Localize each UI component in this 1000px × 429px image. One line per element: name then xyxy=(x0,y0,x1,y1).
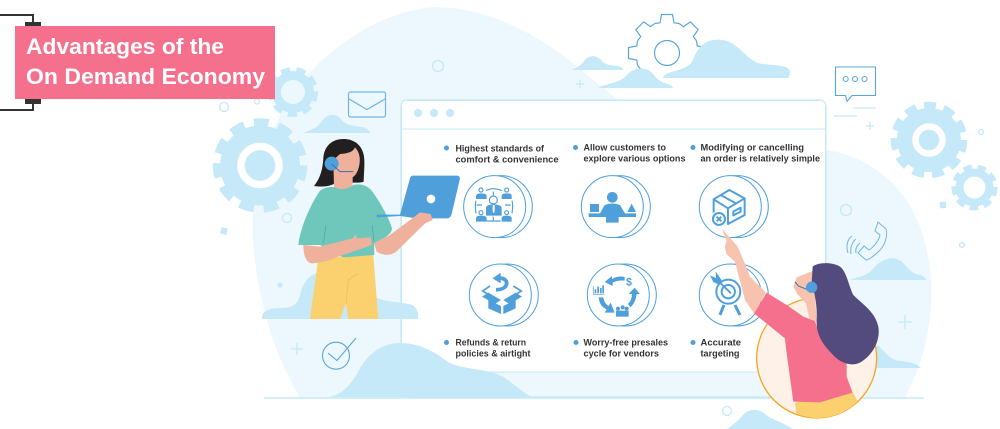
feature: modifying an order: an order is relatively simple xyxy=(700,154,820,165)
headset xyxy=(795,282,817,293)
feature: accurate targeting xyxy=(690,337,741,359)
title banner: On Demand Economy xyxy=(26,64,265,89)
shirt xyxy=(298,184,392,257)
feature: modifying an order: Modifying or cancelling xyxy=(700,143,804,154)
background blob right xyxy=(826,150,931,398)
gear: small right xyxy=(954,167,995,208)
feature: refunds: Refunds & return xyxy=(456,337,526,348)
chat bubble icon xyxy=(836,67,876,102)
icon: returned open box xyxy=(469,264,538,326)
icon: person weighing options xyxy=(581,176,650,238)
cloud: lower right xyxy=(860,345,921,368)
feature: worry-free presales xyxy=(574,337,668,359)
feature: refunds xyxy=(444,337,531,359)
ground line xyxy=(264,397,924,399)
illustration: woman with laptop xyxy=(298,139,460,319)
phone icon xyxy=(847,222,887,260)
title banner: Advantages of the xyxy=(26,34,224,59)
hair xyxy=(314,139,364,187)
decorative marks xyxy=(220,60,984,416)
window frame xyxy=(401,100,826,397)
clouds: top group xyxy=(572,40,790,88)
icon: presales cycle: $ xyxy=(626,276,632,288)
check circle icon xyxy=(322,338,356,369)
envelope icon xyxy=(348,92,386,117)
face xyxy=(793,271,817,322)
illustration: woman pointing xyxy=(722,229,879,418)
cloud: window bottom xyxy=(330,343,532,397)
pants xyxy=(795,393,857,418)
feature: highest standards: Highest standards of xyxy=(456,144,545,155)
icon: people network xyxy=(464,176,532,238)
feature: worry-free presales: cycle for vendors xyxy=(584,348,659,359)
gear: small top left xyxy=(270,70,316,114)
icon: presales cycle xyxy=(587,264,656,326)
feature: refunds: policies & airtight xyxy=(456,348,531,359)
feature: modifying an order xyxy=(690,143,820,165)
arm across body xyxy=(303,234,372,263)
pants xyxy=(310,255,378,319)
feature: highest standards: comfort & convenience xyxy=(456,155,558,166)
feature: accurate targeting: targeting xyxy=(700,348,740,359)
gear: large left xyxy=(217,122,303,208)
pointing arm xyxy=(722,229,766,313)
gear: outline top xyxy=(628,14,706,89)
cloud: under small gear xyxy=(303,115,370,133)
feature: worry-free presales: Worry-free presales xyxy=(584,337,668,348)
window dots xyxy=(414,109,454,117)
icon: cancelled box xyxy=(699,176,768,238)
cloud: bottom center xyxy=(727,410,793,429)
orange circle xyxy=(757,298,877,418)
cloud: behind first woman xyxy=(262,273,418,319)
cloud: beside phone xyxy=(850,258,926,280)
feature: accurate targeting: Accurate xyxy=(700,337,741,348)
feature: highest standards xyxy=(444,144,558,166)
feature: allow customers: Allow customers to xyxy=(584,143,666,154)
background blob left xyxy=(253,7,640,398)
title bracket xyxy=(0,15,41,110)
gear: large right xyxy=(894,106,964,174)
headset xyxy=(325,157,353,172)
neck and face xyxy=(333,147,360,189)
feature: allow customers: explore various options xyxy=(584,154,686,165)
hair xyxy=(812,263,879,364)
title banner xyxy=(15,26,275,99)
icon: target xyxy=(699,264,768,326)
raised arm xyxy=(374,212,433,255)
laptop xyxy=(377,176,460,218)
shirt xyxy=(754,293,853,402)
feature: allow customers xyxy=(573,143,686,165)
